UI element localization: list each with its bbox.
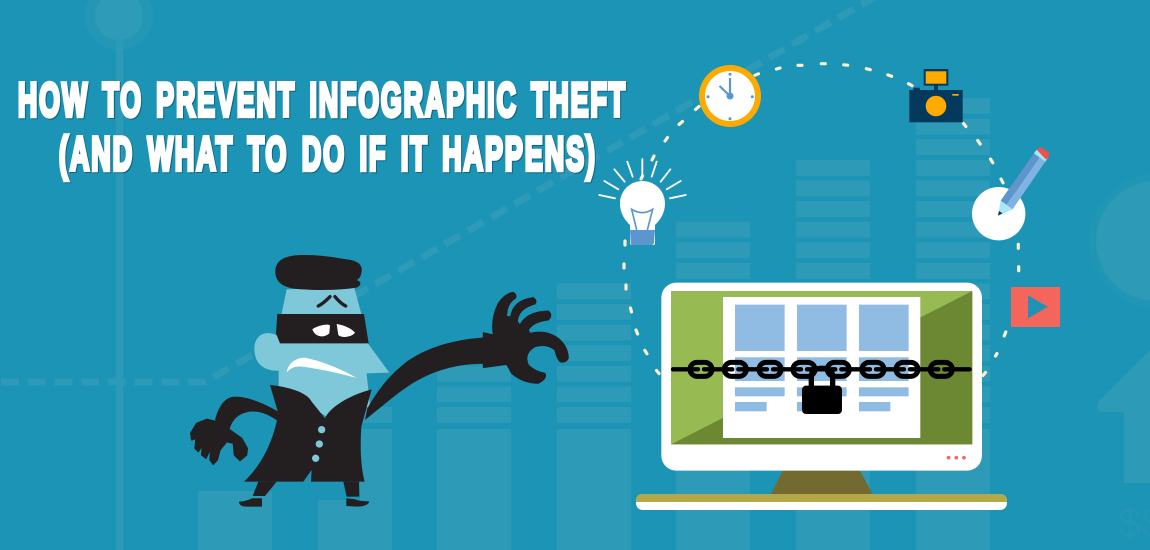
document with content blocks bbox=[723, 297, 920, 438]
thief body and left arm bbox=[215, 385, 372, 507]
monitor base bbox=[636, 494, 1007, 510]
title: (AND WHAT TO DO IF IT HAPPENS) bbox=[59, 127, 597, 180]
background icons: circle, house, dollar bbox=[1089, 174, 1150, 546]
thief head bbox=[254, 287, 389, 417]
title bbox=[18, 73, 627, 180]
monitor screen bbox=[671, 291, 972, 444]
monitor stand bbox=[771, 471, 873, 494]
monitor bbox=[636, 283, 1007, 510]
thief character bbox=[191, 255, 568, 507]
thief eyes bbox=[312, 324, 355, 337]
icon: light bulb bbox=[599, 159, 686, 245]
thief right arm bbox=[365, 337, 485, 420]
dotted arc bbox=[624, 64, 1019, 375]
monitor indicator dots bbox=[947, 456, 966, 459]
title: HOW TO PREVENT INFOGRAPHIC THEFT bbox=[18, 73, 627, 126]
padlock bbox=[802, 368, 842, 414]
icon: clock bbox=[699, 65, 761, 127]
thief right hand bbox=[483, 292, 568, 383]
thief eyebrows bbox=[318, 297, 346, 306]
icon: pencil on white circle bbox=[972, 147, 1049, 240]
chain bbox=[673, 362, 970, 376]
thief buttons bbox=[312, 426, 325, 462]
thief hat bbox=[275, 255, 362, 290]
thief mask bbox=[276, 314, 369, 343]
monitor frame bbox=[661, 283, 982, 471]
thief left hand bbox=[191, 419, 247, 464]
thief mouth bbox=[287, 358, 357, 378]
icon: camera bbox=[909, 69, 963, 122]
icon: video play bbox=[1011, 287, 1060, 327]
